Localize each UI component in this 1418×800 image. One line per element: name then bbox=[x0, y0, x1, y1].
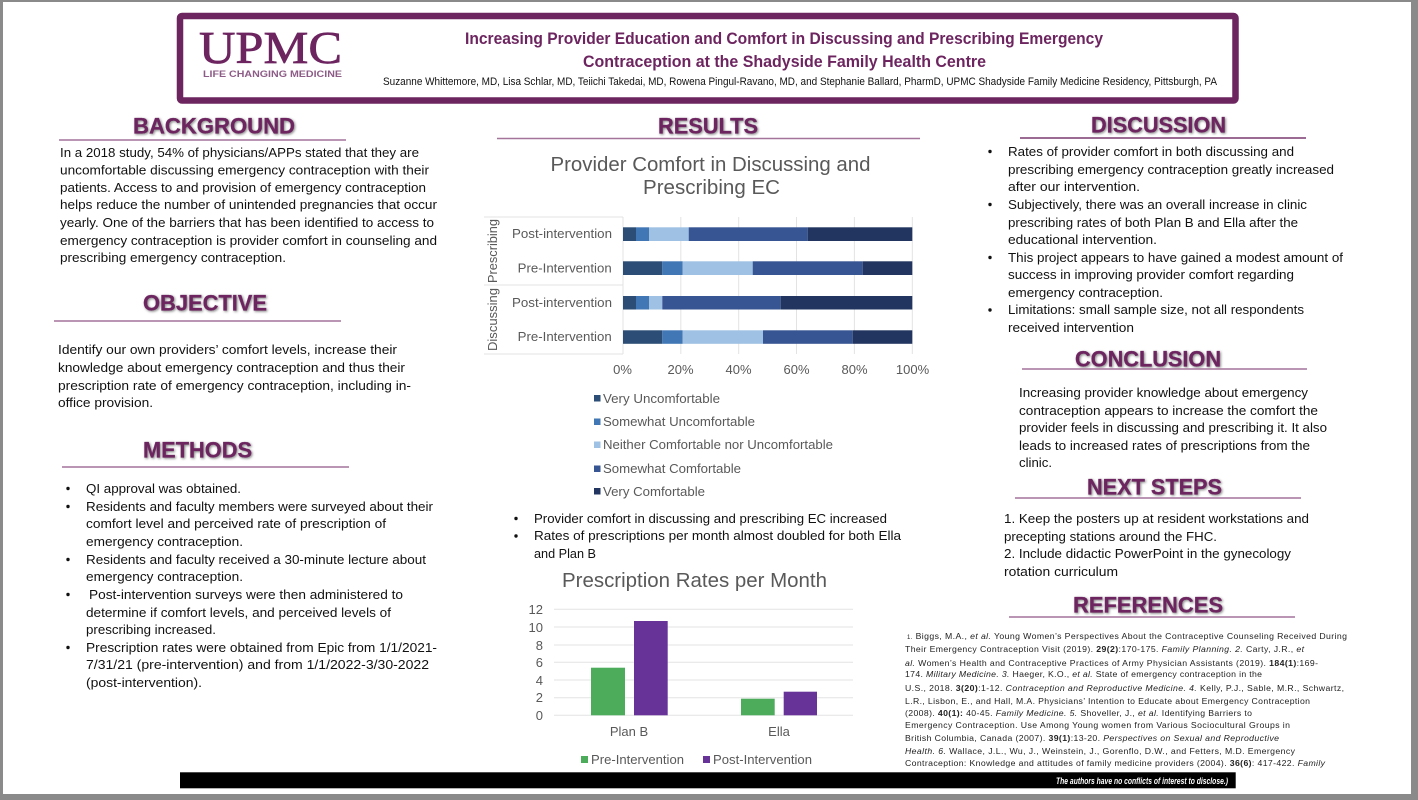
reference list: Contraception: Knowledge and attitudes of family medicine providers (2004). 36(6): 417-422. Family bbox=[905, 758, 1326, 768]
y axis labels: 10 bbox=[529, 620, 543, 635]
background text bbox=[60, 146, 438, 265]
poster title bbox=[465, 30, 1104, 71]
background text: yearly. One of the barriers that has been identified to access to bbox=[60, 216, 434, 230]
methods bullet list: QI approval was obtained. bbox=[86, 482, 241, 496]
background text: emergency contraception is provider comfort in counseling and bbox=[60, 234, 437, 248]
reference list bbox=[905, 631, 1347, 768]
methods bullet list: (post-intervention). bbox=[86, 676, 202, 690]
comfort legend: Somewhat Uncomfortable bbox=[603, 414, 755, 429]
background text: patients. Access to and provision of emergency contraception bbox=[60, 181, 426, 195]
heading: background: BACKGROUND bbox=[133, 114, 295, 138]
reference list: Emergency Contraception. Use Among Young women from Various Sociocultural Groups in bbox=[905, 720, 1290, 730]
heading: references: REFERENCES bbox=[1073, 592, 1223, 618]
methods bullet list: emergency contraception. bbox=[86, 570, 243, 584]
background text: In a 2018 study, 54% of physicians/APPs stated that they are bbox=[60, 146, 419, 160]
x axis percent labels: 100% bbox=[896, 362, 930, 377]
heading: objective: OBJECTIVE bbox=[143, 290, 267, 316]
panel: discussion bbox=[988, 112, 1343, 335]
reference list: U.S., 2018. 3(20):1-12. Contraception and Reproductive Medicine. 4. Kelly, P.J., Sable, M.R., Schwartz, bbox=[905, 683, 1344, 693]
y axis labels bbox=[529, 602, 543, 723]
next steps list bbox=[1004, 512, 1309, 579]
category labels bbox=[610, 724, 791, 739]
discussion bullet list: prescribing rates of both Plan B and Ella after the bbox=[1008, 216, 1298, 230]
background text: helps reduce the number of unintended pregnancies that occur bbox=[60, 198, 438, 212]
reference list: al. Women’s Health and Contraceptive Practices of Army Physician Assistants (2019). 184(1):169- bbox=[905, 658, 1318, 668]
category labels: Post-intervention bbox=[512, 295, 612, 310]
legend: Post-Intervention bbox=[713, 752, 812, 767]
conclusion text bbox=[1019, 386, 1327, 470]
heading: next steps: NEXT STEPS bbox=[1087, 474, 1222, 500]
methods bullet list: prescribing increased. bbox=[86, 623, 216, 637]
methods bullet list: Residents and faculty members were surveyed about their bbox=[86, 500, 434, 514]
objective text: knowledge about emergency contraception and thus their bbox=[58, 361, 406, 375]
comfort legend: Very Comfortable bbox=[603, 484, 705, 499]
methods bullet list bbox=[66, 482, 437, 690]
reference list: Their Emergency Contraception Visit (2019). 29(2):170-175. Family Planning. 2. Carty, J.R., et bbox=[905, 644, 1305, 654]
y axis labels: 8 bbox=[536, 638, 543, 653]
background text: uncomfortable discussing emergency contraception with their bbox=[60, 164, 430, 178]
x axis percent labels: 20% bbox=[667, 362, 694, 377]
reference list: British Columbia, Canada (2007). 39(1):13-20. Perspectives on Sexual and Reproductive bbox=[905, 733, 1279, 743]
reference list: 1. Biggs, M.A., et al. Young Women’s Perspectives About the Contraceptive Counseling Received During bbox=[907, 631, 1347, 641]
conclusion text: leads to increased rates of prescriptions from the bbox=[1019, 439, 1310, 453]
category labels: Plan B bbox=[610, 724, 648, 739]
category labels: Post-intervention bbox=[512, 226, 612, 241]
reference list: (2008). 40(1): 40-45. Family Medicine. 5. Shoveller, J., et al. Identifying Barriers to bbox=[905, 708, 1252, 718]
poster title: Contraception at the Shadyside Family Health Centre bbox=[583, 53, 986, 71]
x axis percent labels: 0% bbox=[613, 362, 632, 377]
panel: conclusion bbox=[1019, 346, 1327, 470]
next steps list: rotation curriculum bbox=[1004, 565, 1118, 579]
y axis labels: 4 bbox=[536, 673, 543, 688]
next steps list: precepting stations around the FHC. bbox=[1004, 530, 1217, 544]
comfort legend: Neither Comfortable nor Uncomfortable bbox=[603, 437, 833, 452]
discussion bullet list: prescribing emergency contraception greatly increased bbox=[1008, 163, 1334, 177]
conclusion text: clinic. bbox=[1019, 456, 1052, 470]
discussion bullet list bbox=[988, 145, 1343, 335]
reference list: Health. 6. Wallace, J.L., Wu, J., Weinstein, J., Gorenflo, D.W., and Fetters, M.D. Emergency bbox=[905, 746, 1296, 756]
category labels: Prescribing bbox=[485, 219, 500, 283]
comfort legend bbox=[594, 391, 833, 499]
disclosure note: The authors have no conflicts of interest to disclose.) bbox=[1056, 776, 1228, 786]
y axis labels: 6 bbox=[536, 655, 543, 670]
heading: results: RESULTS bbox=[658, 114, 758, 138]
UPMC logo: LIFE CHANGING MEDICINE bbox=[203, 69, 342, 79]
discussion bullet list: after our intervention. bbox=[1008, 180, 1140, 194]
next steps list: 2. Include didactic PowerPoint in the gynecology bbox=[1004, 547, 1292, 561]
reference list: 174. Military Medicine. 3. Haeger, K.O., et al. State of emergency contraception in the bbox=[905, 669, 1262, 679]
bar: prescribing post-intervention bbox=[623, 227, 912, 241]
panel: results bbox=[484, 114, 930, 767]
conclusion text: provider feels in discussing and prescribing it. It also bbox=[1019, 421, 1327, 435]
category labels: Ella bbox=[768, 724, 791, 739]
methods bullet list: determine if comfort levels, and perceived levels of bbox=[86, 606, 392, 620]
header banner bbox=[180, 16, 1236, 100]
heading: conclusion: CONCLUSION bbox=[1075, 346, 1221, 372]
conclusion text: Increasing provider knowledge about emergency bbox=[1019, 386, 1309, 400]
conclusion text: contraception appears to increase the comfort the bbox=[1019, 404, 1318, 418]
category labels: Pre-Intervention bbox=[518, 260, 612, 276]
objective text bbox=[58, 343, 411, 410]
y axis labels: 2 bbox=[536, 690, 543, 705]
panel: next steps bbox=[1004, 474, 1309, 579]
bars: Plan B bbox=[591, 621, 668, 715]
y axis labels: 12 bbox=[529, 602, 543, 617]
discussion bullet list: emergency contraception. bbox=[1008, 286, 1163, 300]
panel: methods bbox=[62, 438, 437, 690]
x axis percent labels bbox=[613, 362, 930, 377]
authors: Suzanne Whittemore, MD, Lisa Schlar, MD, Teiichi Takedai, MD, Rowena Pingul-Ravano, MD, and Stephanie Ballard, PharmD, UPMC Shadyside Family Medicine Residency, Pittsburgh, PA bbox=[383, 76, 1218, 88]
methods bullet list: comfort level and perceived rate of prescription of bbox=[86, 517, 387, 531]
panel: references bbox=[905, 592, 1347, 768]
chart title: Provider Comfort in Discussing and bbox=[550, 154, 870, 176]
discussion bullet list: Limitations: small sample size, not all respondents bbox=[1008, 303, 1304, 317]
chart title: Prescription Rates per Month bbox=[562, 570, 827, 592]
category labels bbox=[485, 219, 612, 351]
comfort legend: Very Uncomfortable bbox=[603, 391, 720, 406]
legend: Pre-Intervention bbox=[591, 752, 684, 767]
panel: objective bbox=[54, 290, 411, 410]
x axis percent labels: 60% bbox=[783, 362, 810, 377]
reference list: L.R., Lisbon, E., and Hall, M.A. Physicians’ Intention to Educate about Emergency Contraception bbox=[905, 696, 1310, 706]
UPMC logo: UPMC bbox=[199, 22, 342, 73]
results bullet list: and Plan B bbox=[534, 547, 596, 561]
x axis percent labels: 80% bbox=[841, 362, 868, 377]
legend bbox=[581, 752, 812, 767]
bar: discussing pre-intervention bbox=[623, 330, 912, 344]
bars: Ella bbox=[741, 692, 817, 715]
methods bullet list: emergency contraception. bbox=[86, 535, 243, 549]
comfort legend: Somewhat Comfortable bbox=[603, 461, 741, 476]
poster title: Increasing Provider Education and Comfort in Discussing and Prescribing Emergency bbox=[465, 30, 1104, 48]
methods bullet list: Post-intervention surveys were then administered to bbox=[89, 588, 403, 602]
methods bullet list: Residents and faculty received a 30-minute lecture about bbox=[86, 553, 426, 567]
category labels: Pre-Intervention bbox=[518, 329, 612, 344]
discussion bullet list: success in improving provider comfort regarding bbox=[1008, 268, 1294, 282]
discussion bullet list: received intervention bbox=[1008, 321, 1134, 335]
discussion bullet list: Subjectively, there was an overall increase in clinic bbox=[1008, 198, 1308, 212]
footer bar bbox=[180, 772, 1236, 788]
heading: methods: METHODS bbox=[143, 438, 252, 462]
results bullet list: Rates of prescriptions per month almost doubled for both Ella bbox=[534, 529, 902, 543]
discussion bullet list: Rates of provider comfort in both discussing and bbox=[1008, 145, 1294, 159]
methods bullet list: 7/31/21 (pre-intervention) and from 1/1/2022-3/30-2022 bbox=[86, 658, 429, 672]
stacked bar chart: provider comfort bbox=[484, 154, 930, 499]
results bullet list bbox=[514, 512, 902, 561]
heading: discussion: DISCUSSION bbox=[1091, 112, 1226, 138]
next steps list: 1. Keep the posters up at resident workstations and bbox=[1004, 512, 1309, 526]
chart title bbox=[550, 154, 870, 199]
panel: background bbox=[59, 114, 438, 265]
discussion bullet list: This project appears to have gained a modest amount of bbox=[1008, 251, 1343, 265]
x axis percent labels: 40% bbox=[725, 362, 752, 377]
objective text: prescription rate of emergency contraception, including in- bbox=[58, 379, 411, 393]
y axis labels: 0 bbox=[536, 708, 543, 723]
methods bullet list: Prescription rates were obtained from Epic from 1/1/2021- bbox=[86, 641, 437, 655]
objective text: office provision. bbox=[58, 396, 153, 410]
results bullet list: Provider comfort in discussing and prescribing EC increased bbox=[534, 512, 887, 526]
category labels: Discussing bbox=[485, 288, 500, 351]
bar: prescribing pre-intervention bbox=[623, 261, 912, 275]
chart title: Prescribing EC bbox=[643, 177, 780, 199]
background text: prescribing emergency contraception. bbox=[60, 251, 286, 265]
objective text: Identify our own providers’ comfort levels, increase their bbox=[58, 343, 398, 357]
discussion bullet list: educational intervention. bbox=[1008, 233, 1157, 247]
bar chart: prescription rates per month bbox=[529, 570, 853, 767]
bar: discussing post-intervention bbox=[623, 296, 912, 310]
